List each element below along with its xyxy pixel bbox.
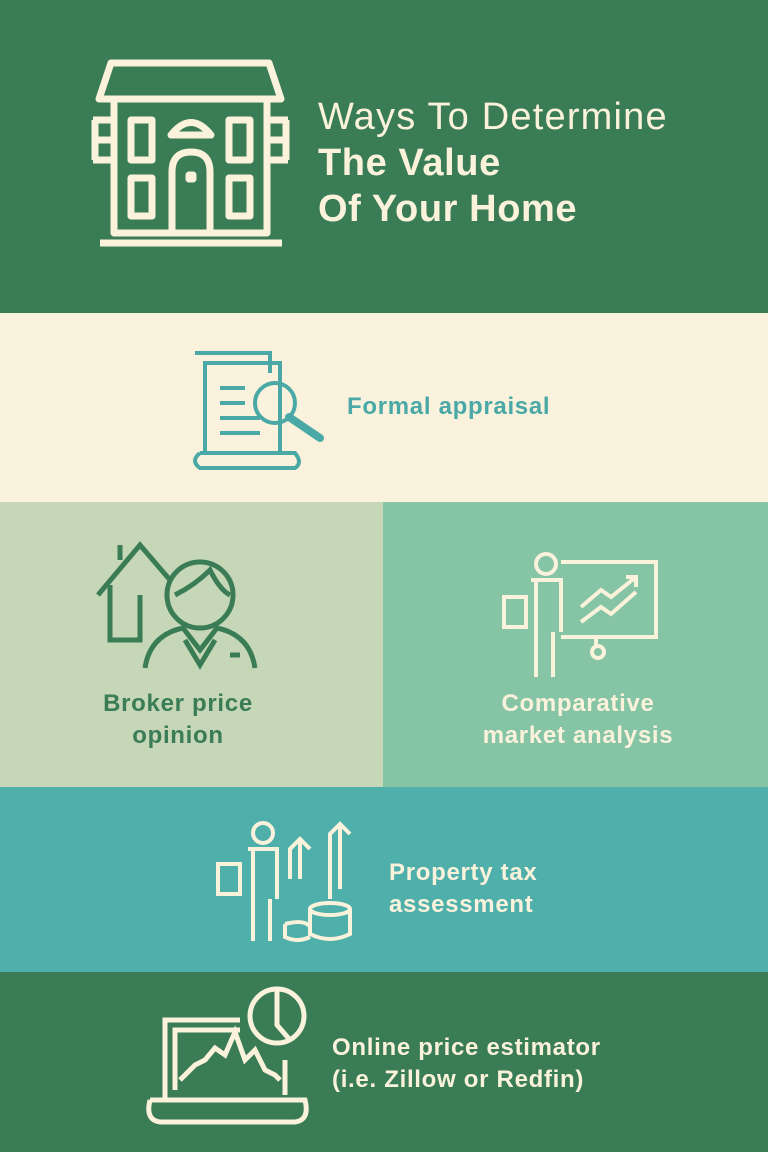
icon: person with coins and arrows (216, 821, 352, 942)
label: Formal appraisal (347, 393, 550, 420)
label: opinion (132, 722, 224, 749)
panel: comparative market analysis (383, 502, 768, 787)
label: (i.e. Zillow or Redfin) (332, 1066, 584, 1093)
title: The Value (318, 142, 501, 184)
label (483, 690, 673, 749)
icon: house (92, 60, 290, 246)
icon: documents with magnifier (193, 351, 324, 470)
label: market analysis (483, 722, 673, 749)
panel: online price estimator (0, 972, 768, 1152)
panel: header (0, 0, 768, 313)
label: Property tax (389, 859, 537, 886)
label (103, 690, 253, 749)
label: assessment (389, 891, 533, 918)
icon: laptop with chart (146, 986, 309, 1124)
panel: broker price opinion (0, 502, 383, 787)
label: Broker price (103, 690, 253, 717)
title: Ways To Determine (318, 96, 668, 138)
title (318, 96, 668, 230)
label: Online price estimator (332, 1034, 601, 1061)
title: Of Your Home (318, 188, 577, 230)
label (389, 859, 537, 918)
icon: presenter with chart (502, 552, 658, 677)
panel: property tax assessment (0, 787, 768, 972)
label: Comparative (501, 690, 655, 717)
icon: house and broker (96, 541, 258, 670)
label (332, 1034, 601, 1093)
panel: formal appraisal (0, 313, 768, 502)
